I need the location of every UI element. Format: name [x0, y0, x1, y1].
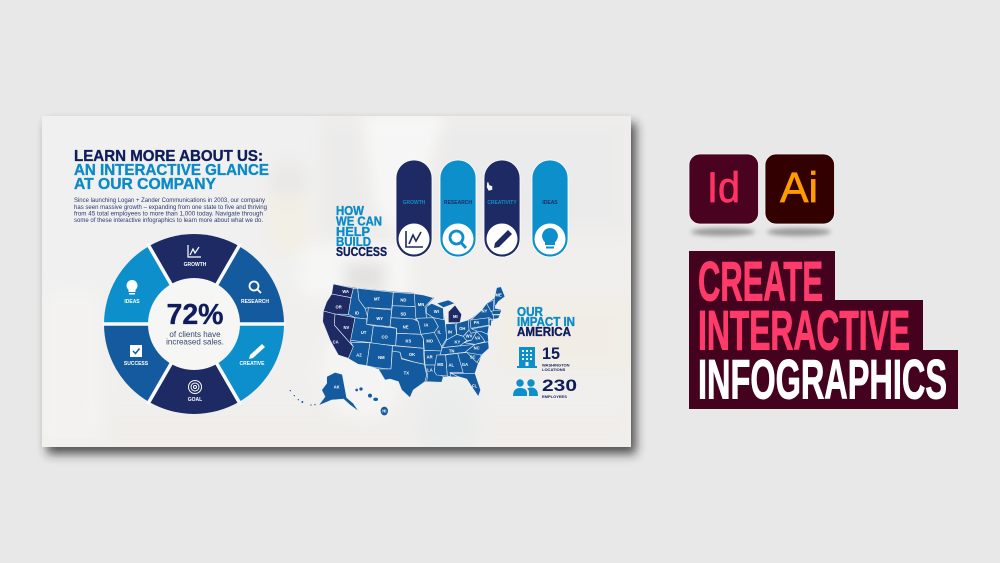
US map: NM [378, 355, 385, 360]
icon: target [188, 380, 202, 394]
icon: checkbox [130, 345, 142, 357]
ring chart: SUCCESS [124, 361, 149, 367]
icon: InDesign: Id [707, 164, 740, 212]
slide drop shadow [47, 123, 636, 454]
ring chart: RESEARCH [241, 299, 269, 305]
centre stat: increased sales. [166, 338, 224, 346]
pill: ideas: IDEAS [542, 200, 558, 206]
pill: growth: GROWTH [403, 200, 426, 206]
segment: success [104, 324, 194, 402]
intro paragraph: has seen massive growth – expanding from one state to five and thriving [74, 205, 267, 211]
pill: creativity [484, 160, 520, 257]
centre stat: 72% [166, 299, 224, 331]
centre stat: of clients have [169, 330, 221, 339]
ring chart: IDEAS [124, 299, 140, 305]
icon: InDesign [689, 154, 758, 224]
stat: locations: LOCATIONS [542, 367, 566, 372]
US map: MO [426, 339, 434, 344]
segment: creative [194, 324, 284, 402]
ring chart: GOAL [188, 397, 202, 403]
US map: KS [405, 339, 411, 344]
US map: IN [448, 330, 452, 335]
how we can help heading: WE CAN [336, 214, 382, 228]
how we can help heading: HOW [336, 204, 364, 218]
icon: pencil [249, 344, 265, 359]
US map: WY [376, 316, 383, 321]
stat: employees: 230 [542, 376, 577, 395]
US map: VA [475, 335, 480, 340]
US map: OH [459, 326, 465, 331]
US map: ID [355, 310, 359, 315]
US map: NC [474, 345, 480, 350]
icon: building [517, 347, 537, 368]
how we can help heading: BUILD [336, 235, 371, 249]
our impact heading [517, 305, 575, 339]
US map: WV [466, 334, 473, 339]
US map: OK [409, 352, 415, 357]
US map: AL [449, 363, 455, 368]
ring chart [102, 234, 286, 414]
icon: Illustrator [765, 154, 834, 224]
US map: AR [427, 354, 433, 359]
US map: HI [382, 408, 386, 413]
US map: MI [453, 314, 458, 319]
US map: AK [334, 385, 340, 390]
intro paragraph: some of these interactive infographics to learn more about what we do. [74, 218, 263, 224]
our impact heading: AMERICA [517, 325, 571, 339]
cursor icon [486, 182, 492, 191]
pill: research: RESEARCH [444, 200, 472, 206]
US map: GA [462, 362, 468, 367]
heading [74, 148, 269, 193]
US map: NY [481, 309, 487, 314]
stat: locations [542, 344, 570, 372]
slide panel with faded photo background [42, 116, 631, 460]
US map: ME [496, 293, 502, 298]
heading: LEARN MORE ABOUT US: [74, 148, 263, 165]
stat: employees: EMPLOYEES [542, 394, 567, 399]
pill: growth [396, 160, 432, 257]
ring chart: GROWTH [184, 262, 207, 268]
heading: AN INTERACTIVE GLANCE [74, 162, 269, 179]
icon shadow: InDesign [691, 228, 755, 236]
US map: SC [470, 354, 476, 359]
ring chart: CREATIVE [240, 361, 265, 367]
US map: AZ [356, 353, 362, 358]
how we can help heading [336, 204, 387, 259]
US map: IL [437, 330, 442, 335]
intro paragraph: Since launching Logan + Zander Communications in 2003, our company [74, 198, 265, 204]
US map: NV [343, 325, 349, 330]
pill: ideas [532, 160, 568, 257]
stat: locations: 15 [542, 344, 560, 363]
intro paragraph [74, 198, 267, 224]
centre stat [166, 299, 224, 346]
US map: KY [454, 339, 460, 344]
US map: CO [382, 335, 389, 340]
icon: growth chart [188, 245, 201, 257]
segment: ideas [104, 246, 194, 324]
US map: MT [374, 297, 380, 302]
intro paragraph: from 45 total employees to more than 1,000 today. Navigate through [74, 212, 263, 218]
US map: TX [404, 370, 409, 375]
segment: goal [149, 324, 239, 414]
stat: employees [542, 376, 577, 399]
US map: SD [400, 312, 406, 317]
US map: MS [437, 362, 444, 367]
icon: people [513, 379, 538, 396]
US map: ND [400, 298, 406, 303]
how we can help heading: HELP [336, 225, 370, 239]
US map: LA [427, 367, 433, 372]
US map: NE [403, 325, 409, 330]
title banner: CREATE [698, 250, 823, 312]
icon shadow: Illustrator [767, 228, 831, 236]
title banner [689, 250, 958, 410]
icon: magnifier [250, 282, 261, 293]
how we can help heading: SUCCESS [336, 245, 387, 259]
our impact heading: IMPACT IN [517, 315, 575, 329]
US map: PA [474, 320, 479, 325]
segment: research [194, 246, 284, 324]
US map: UT [361, 330, 367, 335]
US map: WA [342, 289, 349, 294]
stat: locations: WASHINGTON [542, 362, 570, 368]
segment: growth [149, 234, 239, 324]
icon: Illustrator: Ai [780, 164, 818, 212]
US map: MN [418, 302, 424, 307]
icon: light bulb [127, 280, 137, 294]
US map: FL [472, 384, 478, 389]
pill: creativity: CREATIVITY [487, 200, 517, 206]
US map: TN [449, 348, 454, 353]
pill: research [440, 160, 476, 257]
US map: CA [333, 339, 339, 344]
US map: IA [424, 323, 428, 328]
US map: OR [336, 305, 342, 310]
US map [290, 284, 505, 415]
US map: WI [434, 309, 439, 314]
heading: AT OUR COMPANY [74, 176, 216, 193]
our impact heading: OUR [517, 305, 543, 319]
